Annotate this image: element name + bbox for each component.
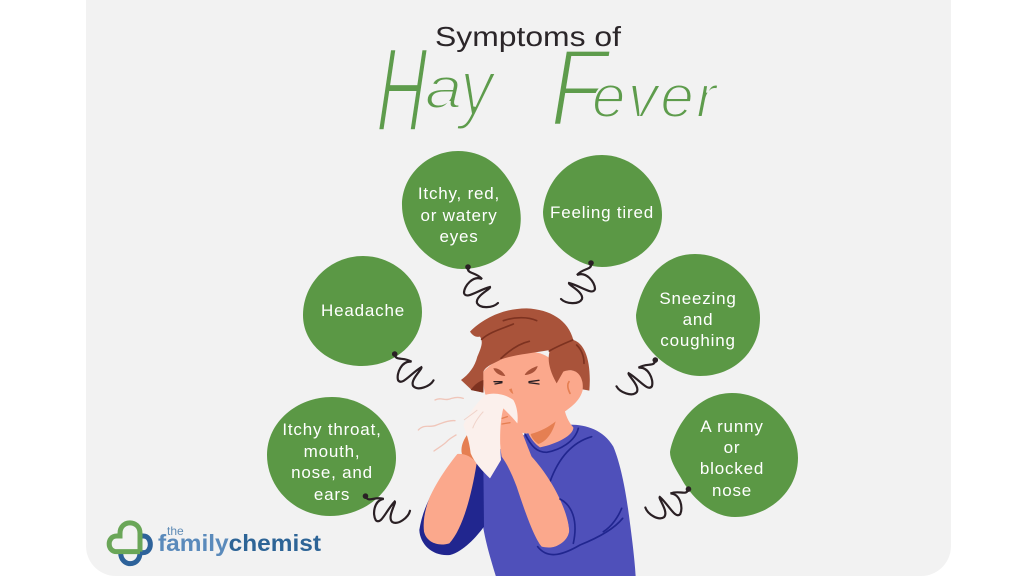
illustration: sneezing person	[418, 308, 636, 576]
bubble: itchy eyes: eyes	[439, 227, 479, 246]
bubble: feeling tired: Feeling tired	[550, 203, 654, 222]
bubble: sneezing and coughing: coughing	[660, 331, 736, 350]
face	[483, 352, 565, 433]
heading: Hay Fever: a	[425, 56, 462, 121]
spring: itchy eyes	[464, 264, 498, 307]
heading: Symptoms of: Symptoms of	[435, 21, 621, 52]
heading: Hay Fever: y	[455, 44, 497, 131]
bubble: itchy throat: nose, and	[291, 463, 373, 482]
bubble: sneezing and coughing: Sneezing	[659, 289, 737, 308]
nose	[509, 388, 513, 394]
ear	[556, 370, 583, 413]
sneeze lines	[418, 397, 463, 451]
bubble: sneezing and coughing	[636, 254, 760, 376]
spring: feeling tired	[561, 260, 595, 303]
shirt	[482, 425, 636, 576]
heading: Hay Fever: F	[550, 27, 612, 150]
bubble: feeling tired	[543, 155, 662, 267]
hair	[461, 308, 590, 393]
bubble: sneezing and coughing: and	[683, 310, 713, 329]
bubble: itchy eyes	[402, 151, 521, 269]
heading: Hay Fever: ever	[592, 63, 719, 130]
bubble: runny or blocked nose	[670, 393, 798, 517]
heading: Hay Fever: H	[375, 22, 429, 157]
bubble: itchy eyes: or watery	[420, 206, 498, 225]
spring: headache	[390, 343, 435, 394]
tissue	[463, 394, 518, 478]
bubble: runny or blocked nose: blocked	[700, 459, 764, 478]
spring: runny nose	[644, 473, 693, 527]
bubble: headache	[303, 256, 422, 366]
sleeve cuff	[540, 497, 576, 557]
sleeve fold lines	[538, 499, 623, 555]
bubble: itchy throat: ears	[314, 485, 350, 504]
heading: Hay Fever	[375, 22, 719, 157]
finger lines	[502, 417, 510, 424]
logo mark	[109, 523, 150, 564]
bubble: itchy eyes: Itchy, red,	[418, 184, 500, 203]
far sleeve	[419, 459, 484, 555]
logo text: the: the	[167, 524, 184, 538]
eyes	[494, 380, 539, 384]
bubble: itchy throat: Itchy throat,	[282, 420, 382, 439]
far hand	[461, 433, 483, 462]
brows	[493, 366, 538, 376]
far arm	[424, 454, 477, 544]
near hand and arm	[499, 412, 569, 548]
hair lines	[482, 318, 584, 363]
logo: the family chemist	[109, 523, 321, 564]
bubble: runny or blocked nose: nose	[712, 481, 752, 500]
spring: itchy throat	[361, 478, 412, 532]
collar lines	[525, 428, 592, 482]
neck	[528, 403, 573, 447]
spring: sneezing	[615, 349, 660, 400]
bubble: itchy throat	[267, 397, 396, 516]
bubble: itchy throat: mouth,	[304, 442, 360, 461]
bubble: runny or blocked nose: A runny	[700, 417, 764, 436]
bubble: runny or blocked nose: or	[724, 438, 740, 457]
bubble: headache: Headache	[321, 301, 405, 320]
logo text: family chemist: familychemist	[158, 530, 321, 556]
